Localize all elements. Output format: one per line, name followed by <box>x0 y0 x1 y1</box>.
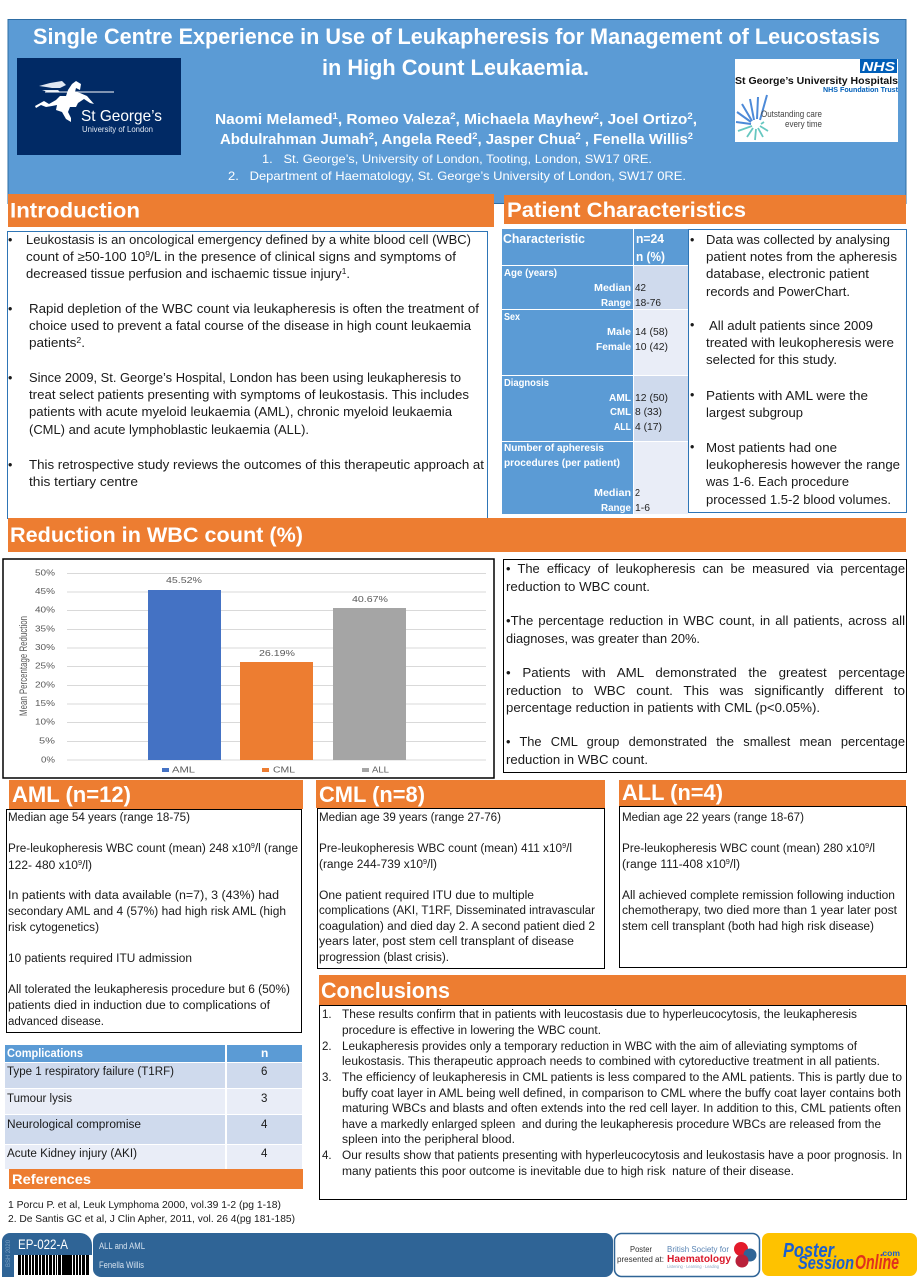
panel: ALL details: stem cell transplant (both had high risk disease) <box>622 921 874 933</box>
panel: introduction text: this tertiary centre <box>29 475 138 489</box>
heading: CML <box>316 780 605 808</box>
panel: conclusions list: 2. <box>322 1041 332 1053</box>
table: patient characteristics: 10 (42) <box>635 341 668 353</box>
panel: introduction text: patients <box>29 336 73 350</box>
authors: , Jasper Chua <box>477 132 577 148</box>
table: patient characteristics <box>502 229 688 514</box>
heading: Patient Characteristics <box>504 195 906 224</box>
heading: Conclusions <box>319 975 906 1005</box>
logo: NHS St George's University Hospitals: NHS Foundation Trust <box>823 87 899 94</box>
affiliations: 2. Department of Haematology, St. George’s University of London, SW17 0RE. <box>228 169 686 183</box>
table: complications: Tumour lysis <box>7 1093 72 1105</box>
heading: ALL: ALL (n=4) <box>622 780 723 805</box>
panel: CML details: /l) <box>427 859 437 871</box>
y axis labels: 10% <box>35 718 55 726</box>
legend: ALL <box>372 766 390 774</box>
table: complications: 4 <box>261 1148 268 1160</box>
panel: patient characteristics notes: database, electronic patient <box>706 267 870 281</box>
table: complications: Type 1 respiratory failure (T1RF) <box>7 1066 174 1078</box>
panel: introduction text: 1 <box>342 267 347 276</box>
heading: Reduction in WBC count <box>8 518 906 552</box>
panel: CML details: /l <box>566 843 572 855</box>
logo: NHS St George's University Hospitals <box>735 59 899 142</box>
authors: , Joel Ortizo <box>599 112 688 128</box>
table: complications: 4 <box>261 1119 268 1131</box>
panel: ALL details: All achieved complete remission following induction <box>622 890 895 902</box>
panel: conclusions list: procedure is effective in lowering the WBC count. <box>342 1025 601 1037</box>
panel: introduction text: 2 <box>76 336 82 345</box>
authors: , Fenella Willis <box>581 132 688 148</box>
authors: 2 <box>472 131 477 141</box>
y axis labels: 40% <box>35 606 55 614</box>
footer: topic and author bar <box>93 1233 613 1277</box>
title <box>33 24 880 80</box>
panel: patient characteristics notes: • <box>690 318 694 332</box>
footer: British Society for Haematology badge: Haematology <box>667 1254 731 1265</box>
footer: poster ID and barcode: EP-022-A <box>18 1236 69 1252</box>
footer: British Society for Haematology badge <box>614 1234 760 1276</box>
authors: 2 <box>687 111 693 121</box>
logo: NHS St George's University Hospitals: NHS <box>862 59 895 74</box>
panel: conclusions list: 3. <box>322 1072 332 1084</box>
y axis labels: 30% <box>35 643 55 652</box>
y axis labels <box>35 568 55 764</box>
panel: introduction text: • <box>8 233 12 247</box>
panel: CML details: coagulation) and died day 2. A second patient died 2 <box>319 921 595 933</box>
panel: CML details: Median age 39 years (range 27-76) <box>319 812 501 824</box>
table: patient characteristics: Male <box>607 326 631 338</box>
panel: ALL details: 9 <box>865 843 869 850</box>
panel: conclusions list: The efficiency of leukapheresis in CML patients is less compared to the AML patients. This is partly due to <box>342 1072 902 1084</box>
panel: introduction text: 9 <box>145 250 151 259</box>
panel: introduction text: • <box>8 458 12 472</box>
table: patient characteristics: 4 (17) <box>635 421 662 433</box>
panel: conclusions list: maturing WBCs and blasts and often extends into the red cell layer. In addition to this, CML patients often <box>342 1103 901 1115</box>
table: complications: Neurological compromise <box>7 1119 141 1131</box>
panel: ALL details: /l <box>869 843 875 855</box>
panel: patient characteristics notes: treated with leukopheresis were <box>706 336 894 350</box>
table: patient characteristics: ALL <box>614 421 631 433</box>
affiliations <box>228 152 686 183</box>
panel: introduction text <box>8 232 488 518</box>
table: patient characteristics: Median <box>594 282 631 294</box>
panel: CML details: years later, post stem cell transplant of disease <box>319 936 574 948</box>
panel: patient characteristics notes: • <box>690 388 694 402</box>
panel: introduction text: (CML) and acute lymphoblastic leukaemia (ALL). <box>29 423 309 437</box>
logo: NHS St George's University Hospitals: St George’s University Hospitals <box>735 75 898 87</box>
panel: reduction commentary: • The CML group demonstrated the smallest mean percentage <box>506 735 905 749</box>
table: patient characteristics: 42 <box>635 282 646 294</box>
panel: patient characteristics notes: selected for this study. <box>706 353 837 367</box>
footer: British Society for Haematology badge: Listening · Learning · Leading <box>667 1264 719 1269</box>
panel: patient characteristics notes: was 1-6. Each procedure <box>705 475 849 489</box>
panel: introduction text: • <box>8 302 12 316</box>
references list: 1 Porcu P. et al, Leuk Lymphoma 2000, vol.39 1-2 (pg 1-18) <box>8 1199 281 1211</box>
panel: ALL details: 9 <box>726 859 730 866</box>
table: patient characteristics: 14 (58) <box>635 326 668 338</box>
panel: CML details: 9 <box>562 843 566 850</box>
affiliations: 1. St. George’s, University of London, Tooting, London, SW17 0RE. <box>262 152 652 166</box>
panel: introduction text: decreased tissue perfusion and ischaemic tissue injury <box>26 267 328 281</box>
panel: patient characteristics notes: All adult patients since 2009 <box>709 319 873 333</box>
table: complications: Acute Kidney injury (AKI) <box>7 1148 137 1160</box>
panel: AML details: /l (range <box>255 843 298 855</box>
table: patient characteristics: 8 (33) <box>635 406 662 418</box>
table: patient characteristics: AML <box>609 392 632 404</box>
panel: AML details: Pre-leukopheresis WBC count (mean) 248 x10 <box>8 843 246 855</box>
panel: reduction commentary: • The efficacy of leukopheresis can be measured via percentage <box>506 562 905 576</box>
panel: conclusions list: These results confirm that in patients with leucostasis due to hyperleucocytosis, the leukapheresis <box>342 1009 857 1021</box>
panel: CML details: 9 <box>423 859 427 866</box>
panel: patient characteristics notes: records and PowerChart. <box>706 285 850 299</box>
panel: introduction text: count of ≥50-100 10 <box>26 250 137 264</box>
heading: ALL <box>619 780 906 806</box>
data labels: 45.52% <box>166 576 202 585</box>
table: patient characteristics: Median <box>594 487 631 499</box>
panel: CML details <box>318 808 604 968</box>
panel: introduction text: This retrospective study reviews the outcomes of this therapeutic approach at <box>29 458 485 472</box>
footer: poster ID and barcode: BSH 2020 <box>6 1239 12 1267</box>
panel: patient characteristics notes: leukopheresis however the range <box>706 458 900 472</box>
panel: AML details: /l) <box>82 860 92 872</box>
heading: Introduction <box>8 194 494 227</box>
panel: introduction text: Leukostasis is an oncological emergency defined by a white blood cell (WBC) <box>26 233 471 247</box>
panel: reduction commentary: • Patients with AML demonstrated the greatest percentage <box>506 666 905 680</box>
table: patient characteristics: Range <box>601 502 631 514</box>
authors <box>215 111 697 148</box>
panel: CML details: progression (blast crisis). <box>319 952 449 964</box>
table: patient characteristics: 12 (50) <box>635 392 668 404</box>
panel: reduction commentary: diagnoses, was greater than 20%. <box>506 632 700 646</box>
panel: ALL details: (range 111-408 x10 <box>622 859 721 871</box>
panel: reduction commentary: •The percentage reduction in WBC count, in all patients, across all <box>506 614 905 628</box>
footer: topic and author bar: Fenella Willis <box>99 1260 144 1270</box>
panel: reduction commentary: percentage reduction in patients with CML (p<0.05%). <box>506 701 820 715</box>
authors: Naomi Melamed <box>215 112 325 128</box>
footer: PosterSessionOnline badge: Session <box>798 1253 854 1273</box>
y axis labels: 25% <box>35 662 55 670</box>
table: complications: 3 <box>261 1093 267 1105</box>
footer: PosterSessionOnline badge: Poster <box>783 1240 835 1262</box>
heading: References <box>9 1169 303 1189</box>
panel: patient characteristics notes: patient notes from the apheresis <box>706 250 897 264</box>
logo: NHS St George's University Hospitals: Outstanding care <box>761 109 822 119</box>
authors: 2 <box>450 111 456 121</box>
header banner <box>8 20 906 204</box>
panel: introduction text: . <box>346 267 350 281</box>
panel: patient characteristics notes <box>688 230 906 512</box>
panel: AML details: secondary AML and 4 (57%) had high risk AML (high <box>8 906 286 918</box>
panel: introduction text: /L in the presence of clinical signs and symptoms of <box>150 250 457 264</box>
authors: , Romeo Valeza <box>338 112 451 128</box>
panel: CML details: Pre-leukopheresis WBC count (mean) 411 x10 <box>319 843 556 855</box>
table: patient characteristics: Age (years) <box>504 267 557 279</box>
panel: AML details: Median age 54 years (range 18-75) <box>8 812 190 824</box>
table: patient characteristics: Diagnosis <box>504 377 549 389</box>
panel: AML details: 10 patients required ITU admission <box>8 953 192 965</box>
table: patient characteristics: n (%) <box>636 250 665 264</box>
panel: introduction text: patients with acute myeloid leukaemia (AML), chronic myeloid leukaemia <box>29 405 452 419</box>
authors: 2 <box>576 131 581 141</box>
panel: reduction commentary: reduction in WBC count. <box>506 753 648 767</box>
heading: Patient Characteristics: Patient Characteristics <box>507 199 746 222</box>
panel: reduction commentary: reduction to WBC count. <box>506 580 650 594</box>
panel: AML details: 9 <box>78 860 82 867</box>
panel: patient characteristics notes: Most patients had one <box>706 441 837 455</box>
y axis labels: 45% <box>35 587 55 596</box>
heading: Conclusions: Conclusions <box>321 978 450 1003</box>
table: patient characteristics: 18-76 <box>635 297 661 309</box>
panel: ALL details: Median age 22 years (range 18-67) <box>622 812 804 824</box>
panel: AML details: 122- 480 x10 <box>8 860 75 872</box>
table: patient characteristics: Number of apheresis <box>504 442 604 454</box>
table: patient characteristics: Characteristic <box>503 232 585 246</box>
y axis title: Mean Percentage Reduction <box>18 616 30 716</box>
panel: patient characteristics notes: largest subgroup <box>706 406 803 420</box>
logo: NHS St George's University Hospitals: every time <box>785 119 822 129</box>
panel: patient characteristics notes: Data was collected by analysing <box>706 233 890 247</box>
panel: reduction commentary: reduction to WBC count. This was significantly different to <box>506 684 905 698</box>
data labels <box>166 576 388 658</box>
panel: CML details: (range 244-739 x10 <box>319 859 419 871</box>
panel: introduction text: Since 2009, St. George’s Hospital, London has been using leukapheresis to <box>29 371 461 385</box>
table: patient characteristics: 1-6 <box>635 502 650 514</box>
panel: introduction text: • <box>8 371 12 385</box>
footer: British Society for Haematology badge: British Society for <box>667 1245 729 1254</box>
title: Single Centre Experience in Use of Leukapheresis for Management of Leucostasis <box>33 24 880 49</box>
barcode <box>18 1255 89 1275</box>
panel: AML details: All tolerated the leukapheresis procedure but 6 (50%) <box>8 984 290 996</box>
table: complications <box>5 1045 302 1169</box>
footer: topic and author bar: ALL and AML <box>99 1241 145 1251</box>
y axis labels: 5% <box>39 736 55 746</box>
panel: conclusions list: spleen into the peripheral blood. <box>342 1134 515 1146</box>
authors: , Angela Reed <box>374 132 472 148</box>
y axis labels: 0% <box>41 756 55 764</box>
panel: AML details: risk cytogenetics) <box>8 922 99 934</box>
authors: 2 <box>369 131 374 141</box>
table: complications: Complications <box>7 1046 83 1060</box>
panel: ALL details: Pre-leukopheresis WBC count (mean) 280 x10 <box>622 843 860 855</box>
panel: AML details: In patients with data available (n=7), 3 (43%) had <box>8 890 279 902</box>
panel: ALL details <box>620 806 906 968</box>
panel: conclusions list: have a markedly enlarged spleen and during the leukapheresis procedure WBCs are released from the <box>342 1119 881 1131</box>
authors: 2 <box>594 111 599 121</box>
table: patient characteristics: 2 <box>635 487 640 499</box>
logo: St George's University of London <box>17 58 181 155</box>
logo: St George's University of London: St George’s <box>81 108 162 125</box>
legend: AML <box>172 766 196 774</box>
table: patient characteristics: n=24 <box>636 232 664 246</box>
table: patient characteristics: Range <box>601 297 631 309</box>
panel: conclusions list: many patients this poor outcome is inevitable due to high risk nature of their disease. <box>342 1166 794 1178</box>
panel: conclusions list: buffy coat layer in AML being well defined, in comparison to CML where the buffy coat layer contains both <box>342 1088 901 1100</box>
heading: Introduction: Introduction <box>10 200 140 222</box>
panel: ALL details: chemotherapy, two died more than 1 year later post <box>622 905 898 917</box>
bars <box>148 590 406 760</box>
panel: AML details <box>6 810 302 1032</box>
legend: CML <box>273 766 296 774</box>
data labels: 40.67% <box>352 595 388 604</box>
panel: conclusions list: 1. <box>322 1009 332 1021</box>
y axis labels: 35% <box>35 624 55 634</box>
panel: reduction commentary <box>504 560 906 772</box>
footer: poster ID and barcode <box>2 1233 92 1277</box>
panel: introduction text: choice used to prevent a fatal course of the disease in high count leukaemia <box>29 319 471 333</box>
panel: patient characteristics notes: • <box>690 233 694 247</box>
footer: PosterSessionOnline badge: Online <box>855 1252 899 1274</box>
references list: 2. De Santis GC et al, J Clin Apher, 2011, vol. 26 4(pg 181-185) <box>8 1213 295 1225</box>
table: complications: n <box>261 1046 268 1060</box>
references list <box>8 1199 295 1225</box>
panel: ALL details: /l) <box>730 859 740 871</box>
panel: AML details: advanced disease. <box>8 1016 104 1028</box>
panel: CML details: One patient required ITU due to multiple <box>319 890 534 902</box>
footer: British Society for Haematology badge: Poster <box>630 1245 652 1254</box>
y axis labels: 15% <box>35 699 55 708</box>
table: patient characteristics: Sex <box>504 311 520 323</box>
footer: British Society for Haematology badge: presented at: <box>617 1255 664 1264</box>
panel: introduction text: Rapid depletion of the WBC count via leukapheresis is often the treatment of <box>29 302 480 316</box>
title: in High Count Leukaemia. <box>322 55 589 80</box>
panel: conclusions list: leukostasis. This therapeutic approach needs to combined with cytoreductive treatment in all patients. <box>342 1056 880 1068</box>
authors: 1 <box>333 111 338 121</box>
authors: Abdulrahman Jumah <box>220 132 364 148</box>
panel: AML details: 9 <box>251 843 255 850</box>
table: patient characteristics: procedures (per patient) <box>504 457 620 469</box>
panel: patient characteristics notes: Patients with AML were the <box>706 389 868 403</box>
y axis labels: 50% <box>35 568 55 578</box>
footer: PosterSessionOnline badge: .com <box>880 1249 900 1258</box>
y axis labels: 20% <box>35 680 55 690</box>
heading: CML: CML (n=8) <box>319 782 425 807</box>
panel: conclusions list: Leukapheresis provides only a temporary reduction in WBC with the aim of alleviating symptoms of <box>342 1041 858 1053</box>
bar chart: mean percentage reduction <box>3 559 494 778</box>
authors: , Michaela Mayhew <box>456 112 594 128</box>
legend <box>162 766 390 774</box>
authors: 2 <box>688 131 693 141</box>
logo: St George's University of London: University of London <box>82 125 153 134</box>
heading: References: References <box>12 1171 91 1187</box>
table: patient characteristics: CML <box>610 406 632 418</box>
panel: introduction text: treat select patients presenting with symptoms of leukostasis. This includes <box>29 388 469 402</box>
data labels: 26.19% <box>259 649 295 658</box>
panel: AML details: patients died in induction due to complications of <box>8 1000 271 1012</box>
footer: PosterSessionOnline badge <box>762 1233 917 1276</box>
panel: patient characteristics notes: • <box>690 440 694 454</box>
heading: Reduction in WBC count: Reduction in WBC count (%) <box>10 524 303 547</box>
panel: CML details: complications (AKI, T1RF, Disseminated intravascular <box>319 905 595 917</box>
table: complications: 6 <box>261 1066 267 1078</box>
table: patient characteristics: Female <box>596 341 631 353</box>
authors: , <box>693 112 697 128</box>
panel: conclusions list <box>320 1006 906 1200</box>
heading: AML: AML (n=12) <box>12 782 131 807</box>
panel: conclusions list: Our results show that patients presenting with hyperleucocytosis and leukostasis have a poor prognosis. In <box>342 1150 902 1162</box>
panel: patient characteristics notes: processed 1.5-2 blood volumes. <box>706 493 891 507</box>
panel: conclusions list: 4. <box>322 1150 332 1162</box>
heading: AML <box>9 780 303 809</box>
panel: introduction text: . <box>81 336 85 350</box>
